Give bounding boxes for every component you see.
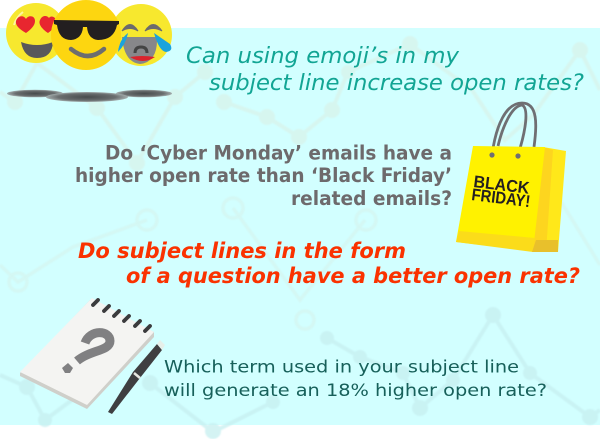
heading: emoji question: Can using emoji’s in my [186,43,460,69]
icon: emoji shadows [7,90,172,102]
text block: Cyber Monday question: related emails? [291,187,452,210]
icon: laughing crying emoji [110,4,172,66]
callout: question form: Do subject lines in the form [78,239,406,264]
question mark [77,333,110,361]
bag side [532,147,566,252]
icon: sunglasses emoji [51,0,121,70]
text block: Cyber Monday question: higher open rate than ‘Black Friday’ [75,164,452,187]
icon: black friday shopping bag [456,103,566,252]
text block: 18% term question: Which term used in your subject line [164,358,519,378]
icon: heart eyes emoji [6,3,66,63]
icon: notepad with question mark and pen [20,298,165,414]
bag label: FRIDAY! [471,185,531,211]
spiral [93,300,150,331]
bag label [471,172,531,211]
callout: question form: of a question have a better open rate? [126,264,580,289]
notepad [20,300,154,409]
bag label: BLACK [473,172,531,198]
bag front [456,146,545,251]
text block: 18% term question: will generate an 18% higher open rate? [164,381,547,401]
heading: emoji question: subject line increase open rates? [209,70,584,96]
bag handles [492,103,536,155]
pen [108,344,162,414]
text block: Cyber Monday question: Do ‘Cyber Monday’ emails have a [105,142,452,164]
